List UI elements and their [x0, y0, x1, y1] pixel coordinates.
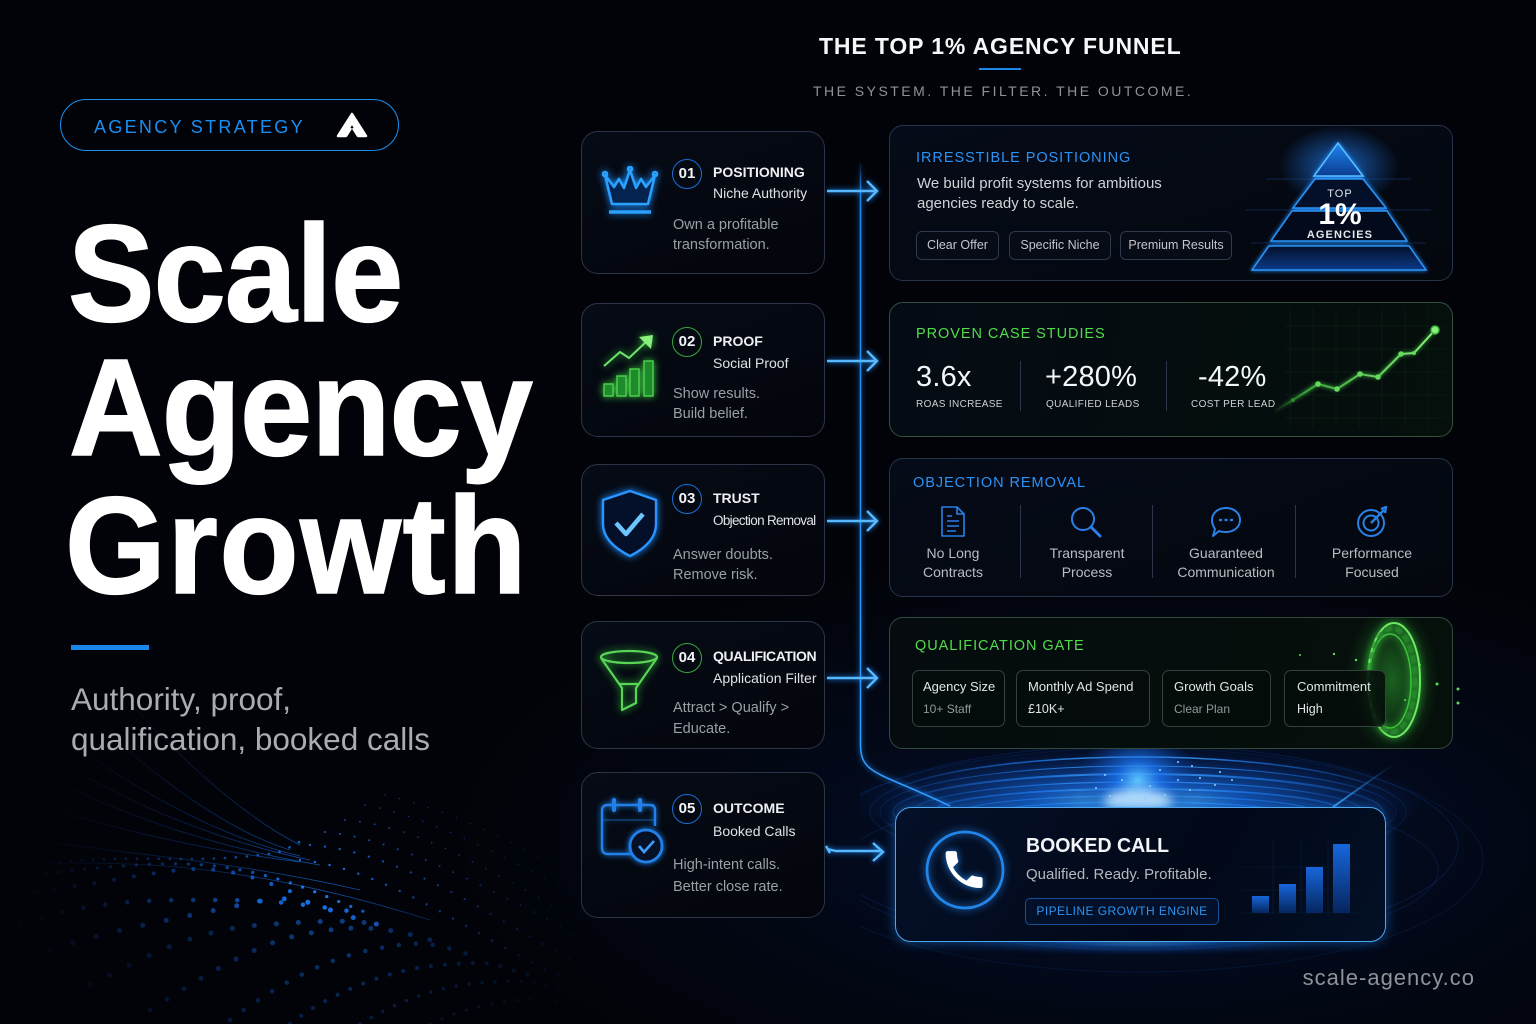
accent bar: [71, 645, 149, 650]
stat: leads: QUALIFIED LEADS: [1046, 399, 1140, 410]
header title: THE TOP 1% AGENCY FUNNEL: [819, 33, 1182, 59]
left card 02 proof: Social Proof: [713, 355, 788, 371]
left card 01 positioning: [581, 131, 825, 274]
left card 04 qualification: Educate.: [673, 721, 730, 737]
number: 01: [679, 165, 695, 182]
left card 04 qualification: Attract > Qualify >: [673, 700, 789, 716]
description: [917, 175, 1162, 212]
text: POSITIONING: [713, 164, 805, 180]
item: transparent process: [1050, 507, 1124, 580]
icon: shield: [595, 484, 664, 562]
left card 02 proof: Show results.: [673, 386, 760, 402]
sparks outside panel: [1456, 688, 1460, 704]
description: agencies ready to scale.: [917, 194, 1079, 212]
item: guaranteed communication: Guaranteed: [1189, 545, 1263, 561]
criteria: commitment: Commitment: [1297, 679, 1371, 694]
icon: growth chart: [597, 330, 660, 403]
stat: cost: [1191, 361, 1275, 410]
text: QUALIFICATION: [713, 648, 816, 664]
pyramid label: [1307, 188, 1373, 241]
item: performance focused: Focused: [1345, 564, 1399, 580]
criteria: growth goals: [1162, 670, 1271, 727]
green portal ring: [1299, 618, 1438, 748]
left card 03 trust: Remove risk.: [673, 567, 758, 583]
title: Growth: [65, 469, 528, 623]
left card 02 proof: [581, 303, 825, 437]
number: [672, 327, 702, 357]
title: Scale: [68, 197, 402, 351]
stat: roas: 3.6x: [916, 361, 972, 393]
left card 01 positioning: Own a profitable: [673, 217, 779, 233]
icon: funnel: [595, 644, 663, 716]
left card 05 outcome: High-intent calls.: [673, 857, 780, 873]
background dot wave: [36, 697, 586, 1024]
item: performance focused: [1332, 506, 1412, 580]
criteria: monthly ad spend: £10K+: [1028, 702, 1064, 716]
connector lines and arrows: [825, 161, 952, 865]
heading: IRRESSTIBLE POSITIONING: [916, 150, 1131, 166]
header tagline: THE SYSTEM. THE FILTER. THE OUTCOME.: [813, 83, 1193, 99]
item: guaranteed communication: Communication: [1177, 564, 1275, 580]
number: [672, 159, 702, 189]
stat: cost: COST PER LEAD: [1191, 399, 1275, 410]
heading: QUALIFICATION GATE: [915, 638, 1085, 654]
panel: booked call: [895, 807, 1386, 942]
bar chart: [1239, 841, 1363, 914]
criteria: agency size: 10+ Staff: [923, 702, 971, 716]
number: 04: [679, 649, 695, 666]
heading: OBJECTION REMOVAL: [913, 475, 1086, 491]
criteria: growth goals: Clear Plan: [1174, 702, 1230, 716]
pyramid: [1246, 128, 1431, 274]
header underline: [979, 68, 1021, 70]
icon: calendar check: [596, 794, 668, 868]
left card 01 positioning: transformation.: [673, 237, 770, 253]
stat: leads: [1045, 361, 1140, 410]
criteria: monthly ad spend: Monthly Ad Spend: [1028, 679, 1134, 694]
criteria: monthly ad spend: [1016, 670, 1150, 727]
description: We build profit systems for ambitious: [917, 175, 1162, 192]
criteria: commitment: [1284, 670, 1386, 727]
item: guaranteed communication: [1177, 507, 1275, 580]
left card 05 outcome: [581, 772, 825, 918]
text: OUTCOME: [713, 800, 785, 816]
number: 03: [679, 490, 695, 507]
stat: leads: +280%: [1045, 361, 1137, 393]
criteria: growth goals: Growth Goals: [1174, 679, 1253, 694]
number: [672, 484, 702, 514]
left card 03 trust: Answer doubts.: [673, 547, 773, 563]
item: performance focused: Performance: [1332, 545, 1412, 561]
criteria: agency size: Agency Size: [923, 679, 995, 694]
text: TRUST: [713, 490, 760, 506]
description: Qualified. Ready. Profitable.: [1026, 866, 1212, 883]
pyramid label: TOP: [1327, 188, 1353, 200]
pyramid label: AGENCIES: [1307, 229, 1373, 241]
panel: irresistible positioning: [889, 125, 1453, 281]
subtitle: qualification, booked calls: [71, 720, 430, 756]
left card 02 proof: Build belief.: [673, 406, 748, 422]
number: 05: [679, 800, 695, 817]
left card 01 positioning: Niche Authority: [713, 185, 807, 201]
footer url: scale-agency.co: [1303, 965, 1475, 990]
chips: Specific Niche: [1020, 238, 1100, 252]
chips: [916, 231, 1232, 260]
stat: cost: -42%: [1198, 361, 1266, 393]
badge: agency strategy: AGENCY STRATEGY: [94, 117, 305, 137]
panel: objection removal: [889, 458, 1453, 597]
item: no long contracts: Contracts: [923, 564, 983, 580]
title: Agency: [69, 331, 532, 485]
line chart: [1274, 308, 1445, 428]
side beams into booked card: [1332, 765, 1392, 807]
text: PROOF: [713, 333, 763, 349]
badge: PIPELINE GROWTH ENGINE: [1036, 904, 1208, 918]
item: no long contracts: No Long: [927, 545, 979, 561]
subtitle: [71, 681, 430, 756]
badge: [1025, 898, 1219, 925]
item: transparent process: Transparent: [1050, 545, 1124, 561]
icon: crown: [596, 160, 664, 220]
stat: roas: ROAS INCREASE: [916, 399, 1003, 410]
title: [65, 197, 534, 623]
number: [672, 643, 702, 673]
badge: agency strategy: [60, 99, 399, 151]
icon: phone: [920, 824, 1010, 916]
left card 03 trust: [581, 464, 825, 596]
left card 04 qualification: [581, 621, 825, 749]
left card 03 trust: Objection Removal: [713, 513, 816, 528]
pyramid label: 1%: [1318, 198, 1362, 231]
glow: booked call rings: [860, 749, 1484, 972]
item: no long contracts: [923, 506, 983, 580]
heading: BOOKED CALL: [1026, 835, 1169, 857]
subtitle: Authority, proof,: [71, 681, 291, 717]
heading: PROVEN CASE STUDIES: [916, 326, 1106, 342]
left card 05 outcome: Better close rate.: [673, 879, 783, 895]
left card 05 outcome: Booked Calls: [713, 823, 796, 839]
item: transparent process: Process: [1062, 564, 1112, 580]
criteria: agency size: [912, 670, 1005, 727]
number: 02: [679, 333, 695, 350]
panel: qualification gate: [889, 617, 1453, 749]
panel: proven case studies: [889, 302, 1453, 437]
chips: Clear Offer: [927, 238, 988, 252]
stat: roas: [916, 361, 1003, 410]
criteria: commitment: High: [1297, 702, 1323, 716]
chips: Premium Results: [1128, 238, 1224, 252]
left card 04 qualification: Application Filter: [713, 670, 816, 686]
number: [672, 794, 702, 824]
